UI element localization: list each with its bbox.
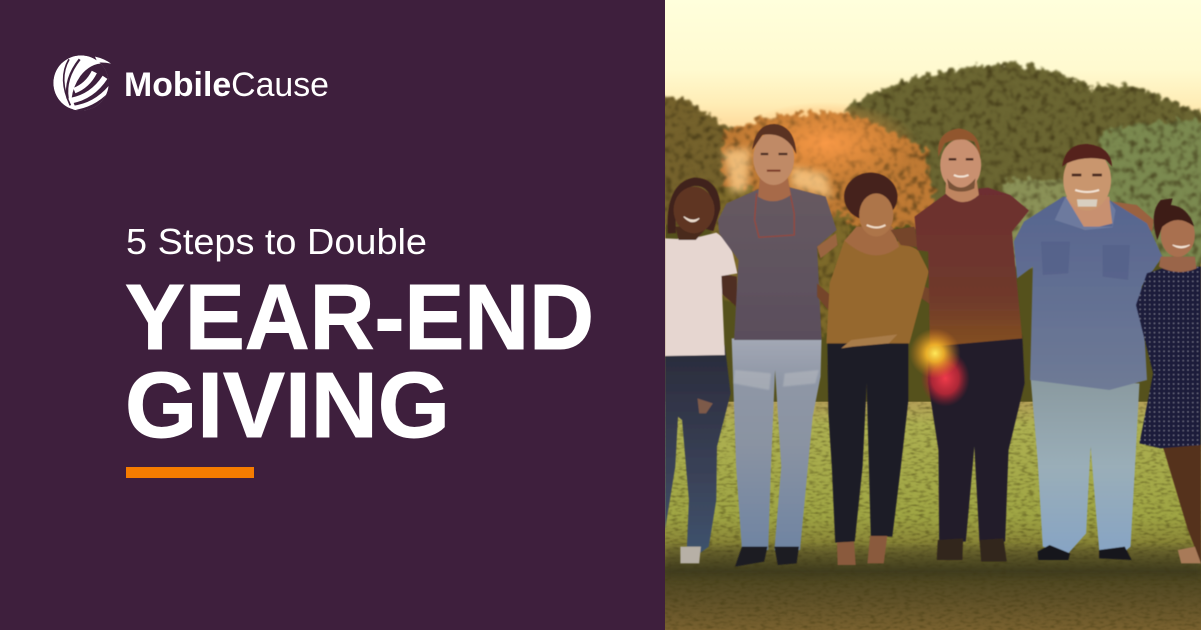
person 5: older man in chambray shirt and light jeans — [1014, 144, 1162, 560]
logo: MobileCause — [53, 55, 329, 115]
logo wordmark: MobileCause — [124, 66, 329, 104]
heading line 2: GIVING — [125, 353, 450, 457]
icon: striped globe — [53, 55, 111, 111]
panel: purple background — [53, 55, 591, 478]
grass — [665, 402, 1201, 630]
orange accent bar — [126, 467, 254, 478]
person 1: woman in white t-shirt — [665, 182, 738, 563]
lens flare — [909, 328, 970, 407]
sky — [665, 0, 1201, 433]
subtitle: 5 Steps to Double — [126, 221, 427, 262]
person 3: woman in mustard top and black jeans — [817, 173, 933, 565]
photo: group of friends in a field at sunset — [665, 0, 1201, 630]
trees — [651, 64, 1201, 410]
person 4: man in maroon t-shirt and dark jeans — [891, 128, 1029, 562]
person 6: woman in polka-dot dress — [1136, 198, 1201, 563]
heading line 1: YEAR-END — [125, 265, 594, 369]
person 2: man in grey t-shirt and light jeans — [718, 124, 838, 567]
